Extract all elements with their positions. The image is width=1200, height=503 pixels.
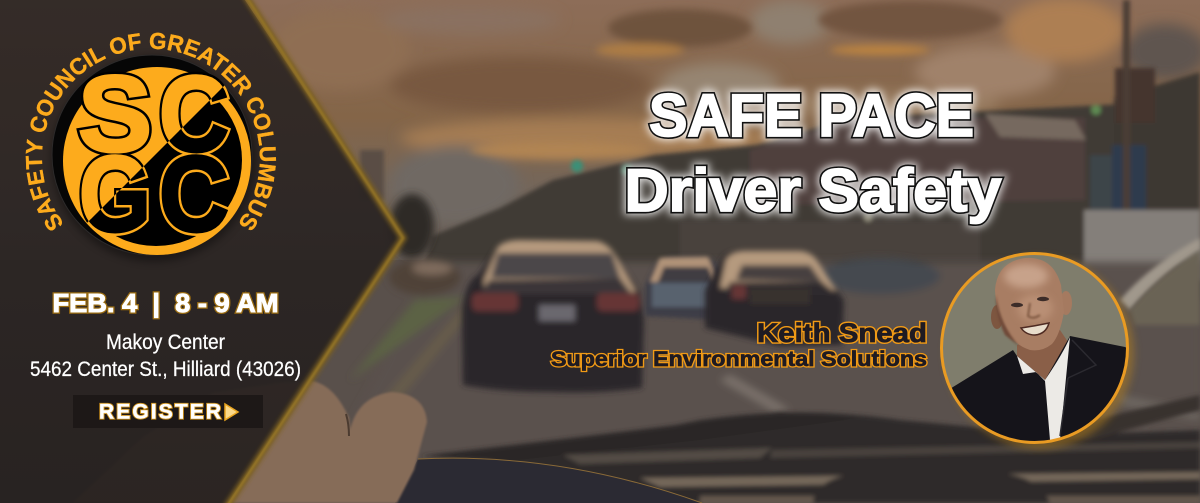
road surface and grass verge (330, 258, 1200, 480)
logo monogram upper, yellow letters: S (78, 53, 152, 174)
title: SAFE PACE (649, 82, 974, 149)
trees beside the road (390, 194, 434, 258)
car ahead (462, 240, 644, 392)
right-side pillar highlight (1120, 238, 1200, 310)
icon: play arrow (225, 404, 238, 420)
driver's hand on the wheel (73, 381, 427, 503)
head (991, 258, 1072, 350)
title: SAFE PACE (649, 82, 974, 149)
logo monogram upper, yellow letters: G (79, 133, 151, 254)
steering wheel (395, 458, 702, 503)
third car (705, 251, 844, 346)
logo yellow half and ring (63, 67, 251, 255)
logo monogram upper, yellow letters: C (159, 53, 229, 174)
logo black disc (52, 55, 252, 255)
speaker name and company: Keith Snead (757, 318, 927, 348)
speaker portrait (940, 252, 1134, 449)
title: Driver Safety (624, 157, 1002, 224)
logo monogram upper, yellow letters: C (159, 53, 229, 174)
date and time: FEB. 4 | 8 - 9 AM (52, 288, 278, 318)
logo monogram upper, yellow letters: S (78, 53, 152, 174)
venue address: 5462 Center St., Hilliard (43026) (30, 358, 301, 381)
title: Driver Safety (624, 157, 1002, 224)
logo monogram upper, yellow letters (76, 72, 224, 223)
neck (1017, 330, 1070, 380)
logo monogram lower, black letters: C (159, 133, 229, 254)
jacket (952, 336, 1126, 441)
title (624, 82, 1002, 224)
hill and buildings on the horizon (360, 0, 1200, 300)
register button: REGISTER (99, 400, 221, 424)
logo monogram lower, black letters (87, 86, 231, 236)
speaker name and company: Superior Environmental Solutions (551, 348, 927, 371)
portrait gold ring (942, 254, 1128, 442)
speaker name and company (551, 318, 927, 371)
logo monogram upper, yellow letters: C (159, 133, 229, 254)
title: Driver Safety (624, 157, 1002, 224)
second car (645, 256, 722, 320)
logo monogram lower, black letters: S (78, 53, 152, 174)
sky with sunset clouds (0, 0, 1200, 260)
date and time: FEB. 4 | 8 - 9 AM (52, 288, 278, 318)
logo monogram upper, yellow letters: G (79, 133, 151, 254)
logo: Safety Council of Greater Columbus (26, 32, 276, 262)
logo monogram lower, black letters: C (159, 53, 229, 174)
venue address: Makoy Center (106, 331, 225, 354)
logo monogram upper, yellow letters: C (159, 133, 229, 254)
panel: dark left chevron (0, 0, 403, 503)
jacket lapel (1060, 340, 1096, 436)
logo monogram lower, black letters: C (159, 133, 229, 254)
register button: REGISTER (99, 400, 221, 424)
venue address (30, 331, 301, 381)
logo monogram lower, black letters: S (78, 53, 152, 174)
logo shadow (51, 56, 257, 262)
logo monogram lower, black letters: C (159, 53, 229, 174)
title: SAFE PACE (649, 82, 974, 149)
speaker name and company: Keith Snead (757, 318, 927, 348)
logo monogram lower, black letters: G (79, 133, 151, 254)
smile (1021, 323, 1049, 335)
register button (73, 395, 263, 428)
wipers, dashboard and bright windshield strips (420, 395, 1200, 503)
eyes (1011, 303, 1023, 307)
logo curved name: SAFETY COUNCIL OF GREATER COLUMBUS (26, 32, 276, 230)
speaker name and company: Superior Environmental Solutions (551, 348, 927, 371)
shirt (1017, 337, 1070, 440)
logo monogram lower, black letters: G (79, 133, 151, 254)
